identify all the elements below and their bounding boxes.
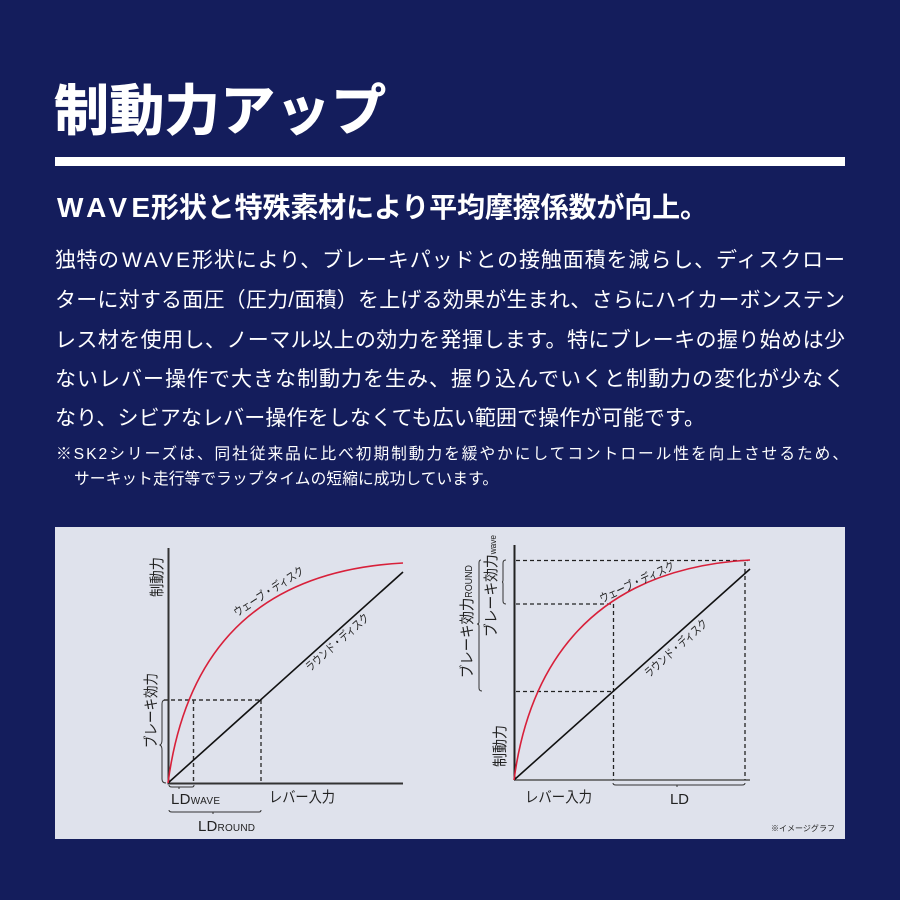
left wave disc curve bbox=[168, 563, 403, 783]
footnote: サーキット走行等でラップタイムの短縮に成功しています。 bbox=[74, 470, 498, 488]
right curve labels: ラウンド・ディスク bbox=[641, 616, 710, 680]
right vertical axis label: 制動力 bbox=[492, 725, 509, 767]
body text: なり、シビアなレバー操作をしなくても広い範囲で操作が可能です。 bbox=[55, 407, 705, 430]
right wave bracket bbox=[502, 560, 506, 604]
left LD round bracket bbox=[169, 810, 261, 814]
right lever input label: レバー入力 bbox=[525, 789, 592, 806]
left LD wave bracket bbox=[169, 785, 194, 789]
right axes bbox=[514, 545, 516, 780]
subheading: WAVE bbox=[57, 192, 150, 223]
left dashed guides bbox=[164, 700, 261, 783]
left lever input label: レバー入力 bbox=[269, 789, 335, 806]
body text: 形状により、ブレーキパッドとの接触面積を減らし、ディスクロー bbox=[192, 249, 845, 272]
footnote bbox=[56, 445, 848, 488]
right dashed guides bbox=[516, 560, 748, 780]
body text: 独特の bbox=[55, 249, 119, 272]
title underline bbox=[55, 157, 845, 166]
right curve labels bbox=[597, 558, 710, 680]
subheading: 形状と特殊素材により平均摩擦係数が向上。 bbox=[151, 191, 708, 223]
left LD round label: LDROUND bbox=[198, 818, 255, 835]
body text: ないレバー操作で大きな制動力を生み、握り込んでいくと制動力の変化が少なく bbox=[55, 368, 845, 391]
right brake effect wave label: ブレーキ効力wave bbox=[482, 535, 500, 637]
right wave disc curve bbox=[514, 560, 750, 780]
body text: レス材を使用し、ノーマル以上の効力を発揮します。特にブレーキの握り始めは少 bbox=[55, 329, 845, 352]
footnote: ※SK2シリーズは、同社従来品に比べ初期制動力を緩やかにしてコントロール性を向上させるため、 bbox=[56, 445, 848, 463]
right LD bracket bbox=[613, 783, 745, 787]
left curve labels: ラウンド・ディスク bbox=[302, 610, 372, 674]
panel: graphs bbox=[55, 527, 845, 839]
right chart bbox=[458, 535, 750, 808]
left vertical axis label: 制動力 bbox=[149, 557, 166, 597]
left round disc line bbox=[168, 572, 403, 783]
left curve labels: ウェーブ・ディスク bbox=[230, 563, 307, 620]
left LD wave label: LDWAVE bbox=[171, 791, 220, 808]
left brake effect bracket bbox=[160, 700, 166, 783]
right round bracket bbox=[477, 560, 482, 691]
right curve labels: ウェーブ・ディスク bbox=[597, 558, 677, 606]
left axes bbox=[168, 548, 403, 784]
left brake effect label: ブレーキ効力 bbox=[142, 673, 160, 748]
right brake effect round label: ブレーキ効力ROUND bbox=[458, 565, 476, 678]
title: 制動力アップ bbox=[54, 80, 386, 142]
right round disc line bbox=[514, 569, 750, 780]
body text bbox=[55, 249, 845, 430]
body text: ターに対する面圧（圧力/面積）を上げる効果が生まれ、さらにハイカーボンステン bbox=[55, 289, 845, 312]
left chart bbox=[142, 548, 403, 835]
body text: WAVE bbox=[122, 249, 190, 272]
image graph note: ※イメージグラフ bbox=[771, 823, 835, 833]
left curve labels bbox=[230, 563, 372, 674]
right LD label: LD bbox=[670, 791, 689, 808]
